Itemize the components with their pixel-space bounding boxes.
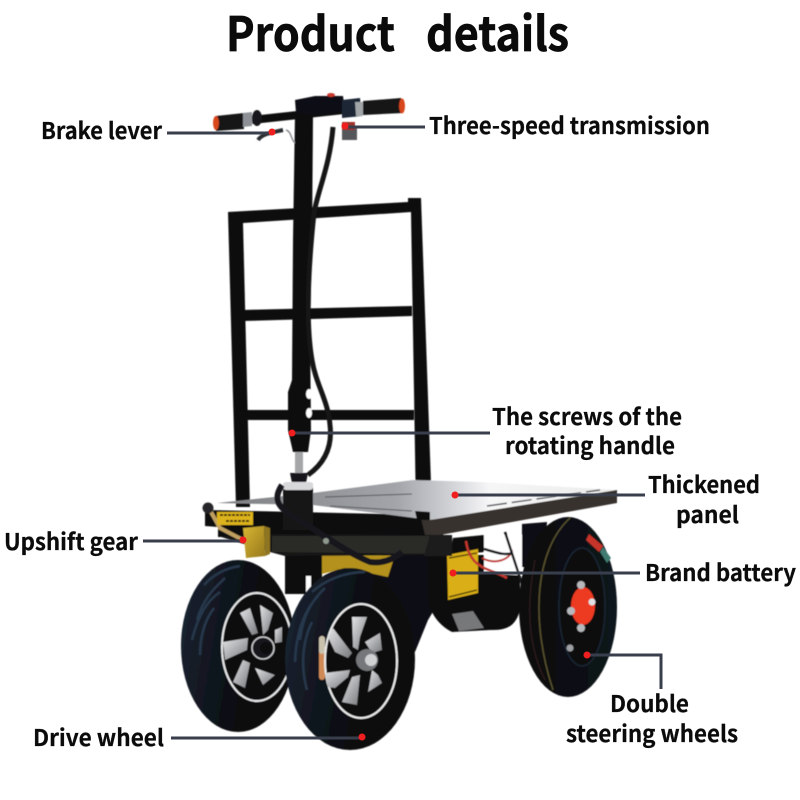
handlebar	[213, 93, 405, 143]
callout: double steering wheels	[566, 652, 738, 749]
handle cable and pivot	[277, 482, 402, 562]
callout: brand battery: Brand battery	[645, 554, 796, 588]
callout: double steering wheels: Double	[610, 685, 689, 719]
callout: brake lever: Brake lever	[41, 112, 163, 146]
callout: brake lever	[41, 112, 276, 146]
steering column	[288, 115, 333, 483]
callout: drive wheel: Drive wheel	[33, 719, 164, 753]
callout: the screws of the rotating handle	[288, 398, 682, 461]
front drive wheel	[285, 568, 415, 750]
rear frame	[228, 198, 432, 512]
upshift lever and gold bracket	[202, 502, 270, 558]
callout: drive wheel	[33, 719, 366, 753]
callout: upshift gear: Upshift gear	[4, 523, 139, 557]
platform panel	[205, 480, 617, 537]
right steering wheel	[519, 517, 617, 697]
callout: double steering wheels: steering wheels	[566, 715, 738, 749]
callout: upshift gear	[4, 523, 246, 557]
callout: thickened panel	[452, 466, 760, 530]
callout: thickened panel: panel	[676, 496, 739, 530]
callout: the screws of the rotating handle: rotating handle	[505, 427, 675, 461]
chassis beam and battery compartment	[218, 522, 547, 652]
callout: thickened panel: Thickened	[648, 466, 760, 500]
rear drive wheel	[181, 560, 295, 732]
title	[226, 0, 569, 65]
callout: brand battery	[450, 554, 796, 588]
callout: three-speed transmission: Three-speed transmission	[429, 107, 710, 141]
electric platform cart product photo	[181, 93, 617, 750]
callout: the screws of the rotating handle: The screws of the	[492, 398, 682, 432]
